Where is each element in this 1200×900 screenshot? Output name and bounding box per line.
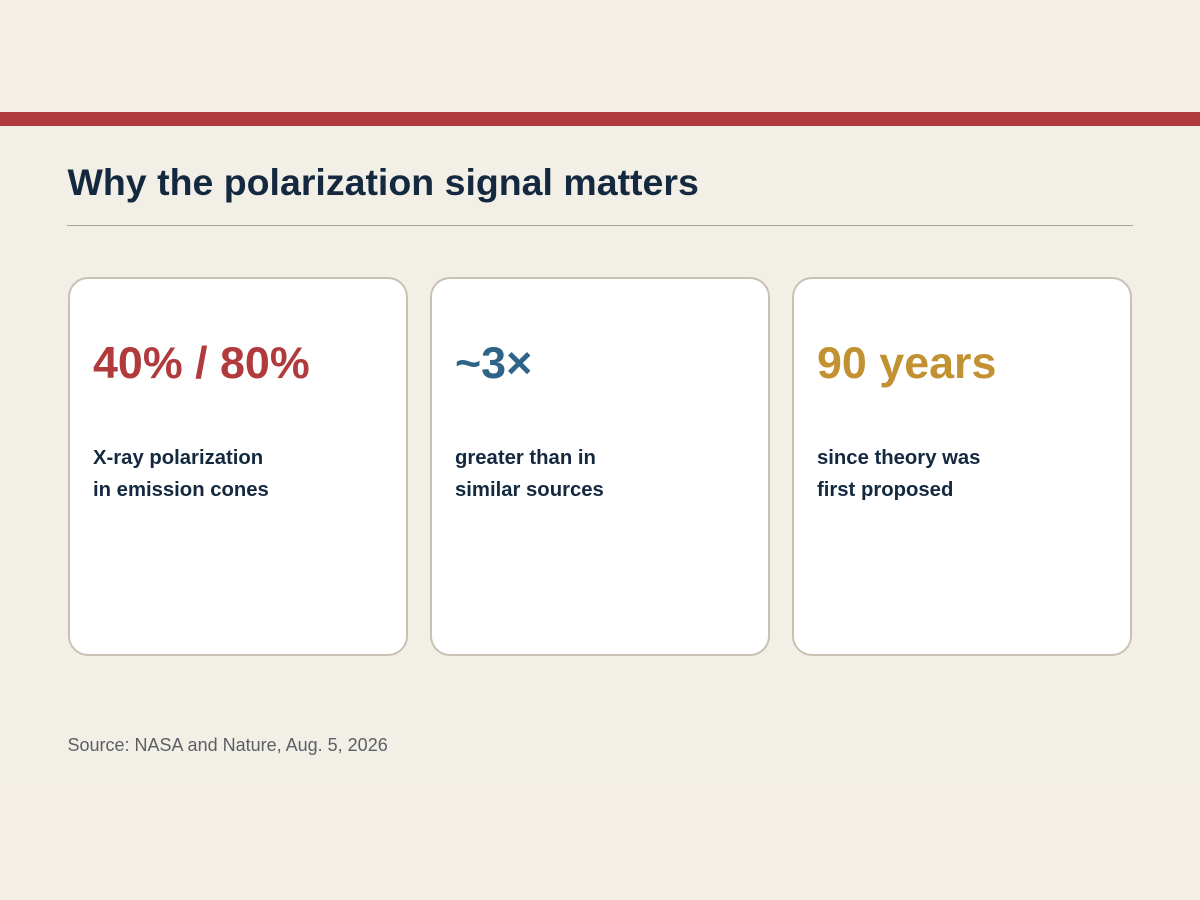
- text: card 3 description: [817, 447, 980, 501]
- stat: 40% / 80%: 40% / 80%: [93, 338, 310, 388]
- text: card 3 description: first proposed: [817, 479, 953, 501]
- text: card 1 description: in emission cones: [93, 479, 269, 501]
- title: Why the polarization signal matters: [68, 161, 699, 203]
- content panel background: [0, 112, 1200, 783]
- text: card 1 description: X-ray polarization: [93, 447, 263, 469]
- text: card 2 description: similar sources: [455, 479, 604, 501]
- stat: 90 years: 90 years: [817, 338, 996, 388]
- panel: card 2: [430, 277, 770, 656]
- stat: ~3×: ~3×: [455, 338, 532, 388]
- red accent bar: [0, 112, 1200, 126]
- source note: Source: NASA and Nature, Aug. 5, 2026: [68, 735, 388, 755]
- panel: card 3: [792, 277, 1132, 656]
- text: card 2 description: [455, 447, 604, 501]
- panel: card 1: [68, 277, 408, 656]
- text: card 2 description: greater than in: [455, 447, 596, 469]
- text: card 3 description: since theory was: [817, 447, 980, 469]
- text: card 1 description: [93, 447, 269, 501]
